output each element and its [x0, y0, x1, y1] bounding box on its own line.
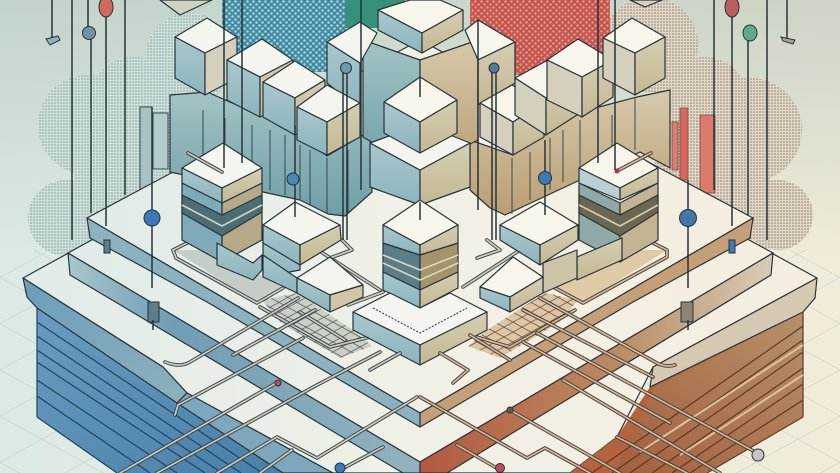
stack: left	[182, 143, 262, 262]
stack: centre	[383, 200, 458, 308]
top object: right	[630, 0, 662, 7]
tower body: centre back	[363, 40, 478, 170]
cube: right 3	[515, 61, 577, 135]
node: blue right	[680, 210, 696, 226]
hanging tags	[104, 240, 735, 322]
layered stack: left	[37, 308, 283, 473]
cube: left 3	[263, 61, 325, 135]
stippled cloud: left	[28, 13, 235, 256]
layered stack: right	[570, 312, 803, 473]
pipes: outer left	[120, 298, 417, 473]
inner floor: lattice right	[468, 293, 578, 358]
cube: right 4	[480, 85, 544, 155]
node: blue mid right	[538, 172, 552, 184]
central block	[353, 293, 487, 365]
cube: right 2	[547, 39, 613, 117]
inner floor: right trough	[555, 250, 667, 303]
node: dark centre right	[489, 63, 499, 73]
box: step right	[480, 250, 577, 312]
cube: back left	[327, 22, 377, 110]
cube: top centre	[378, 0, 463, 53]
pipes: outer right	[420, 298, 757, 473]
cube: back right	[465, 20, 515, 105]
node: red top right	[725, 0, 739, 17]
stippled backdrop: green	[345, 0, 405, 28]
cube: right 1	[603, 18, 665, 95]
pipes: inner left	[173, 240, 383, 347]
small hanging tag: right	[781, 37, 795, 44]
pipes: inner right	[463, 240, 667, 347]
cube: left 2	[227, 39, 293, 117]
short bar: left stack	[188, 153, 222, 172]
node: blue mid left	[287, 173, 299, 185]
node: teal top left	[82, 26, 96, 40]
plate: middle	[68, 60, 773, 473]
background bars: left	[140, 107, 168, 189]
small hanging tag: left	[46, 36, 60, 45]
box: lower right small	[577, 238, 622, 280]
cube: left 1	[175, 18, 237, 95]
background bars: right	[672, 108, 715, 193]
cube: centre	[384, 77, 457, 153]
inner floor: lattice left	[262, 293, 372, 358]
stippled backdrop: blue	[222, 0, 347, 72]
stack: right	[579, 143, 658, 262]
floor grid	[0, 250, 840, 473]
plate: lower right face	[650, 278, 817, 387]
hanging lines	[52, 0, 787, 330]
tower body: left	[170, 92, 372, 216]
top object: left	[160, 0, 212, 15]
box: lower left small	[217, 243, 262, 280]
node: blue left	[144, 210, 160, 226]
box: step left	[263, 255, 363, 312]
stippled backdrop: red	[470, 0, 610, 75]
plate: upper	[87, 40, 753, 427]
cube: left 4	[297, 85, 360, 155]
inner floor: left trough	[173, 250, 283, 303]
tower body: right	[470, 90, 670, 215]
cube: mid left	[263, 202, 341, 277]
tower: centre middle	[370, 133, 470, 205]
node: red top left	[99, 0, 113, 17]
short bar: right stack	[614, 153, 651, 174]
node: teal centre left	[340, 62, 352, 74]
stippled cloud: right	[602, 0, 813, 250]
connector markers on pipes	[275, 380, 764, 473]
cube: mid right	[500, 202, 578, 265]
node: green top right	[743, 25, 757, 41]
